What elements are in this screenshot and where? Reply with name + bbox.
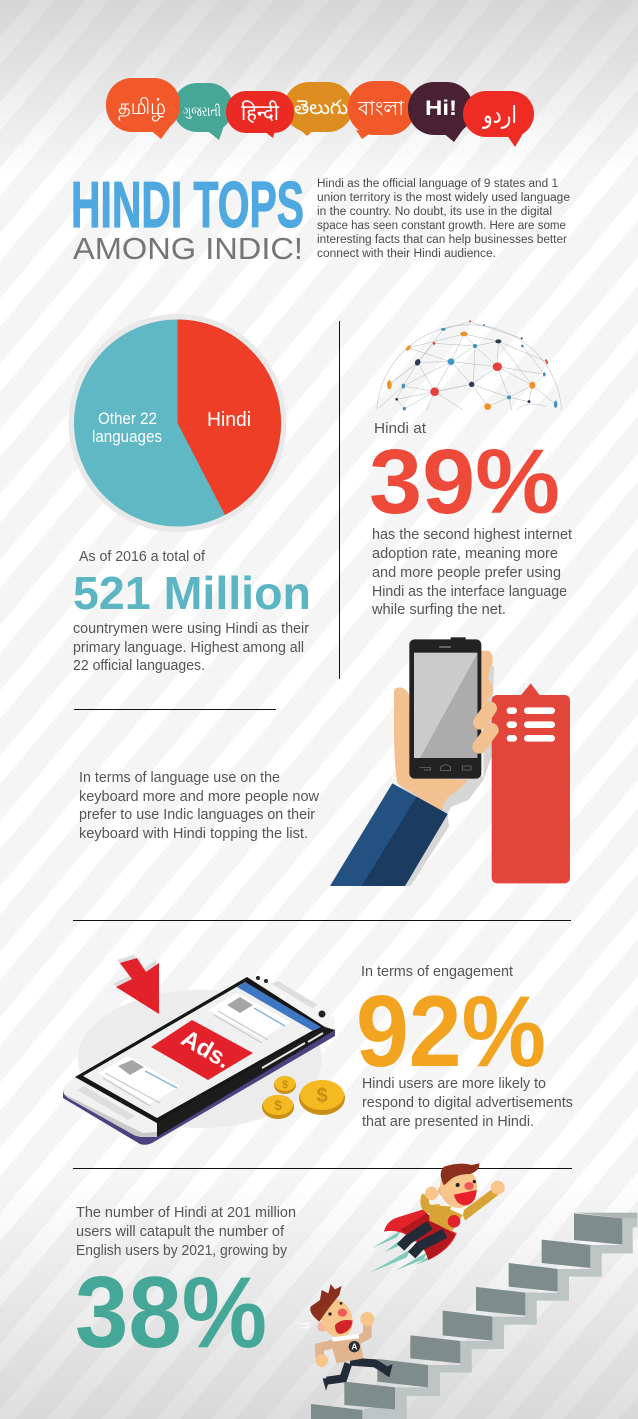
staircase (311, 1213, 637, 1419)
bubble: Telugu (284, 82, 353, 136)
stat: 38%: 38% (75, 1257, 267, 1369)
title (71, 168, 304, 266)
bubble: Hindi (226, 91, 294, 138)
shadows (395, 662, 494, 886)
keyboard paragraph: In terms of language use on the (79, 770, 280, 786)
stat: 521 million: countrymen were using Hindi as their (73, 621, 309, 637)
stat: 92% (356, 964, 573, 1130)
stat: 92%: 92% (356, 976, 546, 1088)
stat: 521 million: 22 official languages. (73, 658, 205, 674)
stat: 39% (369, 421, 572, 618)
stat: 39%: Hindi at (374, 421, 426, 437)
running man (293, 1284, 393, 1391)
bubble: Gujarati (173, 83, 233, 140)
intro paragraph: space has seen constant growth. Here are some (317, 220, 566, 232)
bubble: Bengali (348, 81, 415, 139)
stat: 38%: English users by 2021, growing by (76, 1243, 288, 1259)
pie chart: languages (92, 428, 162, 446)
title: HINDI TOPS (71, 168, 304, 241)
intro paragraph: connect with their Hindi audience. (317, 248, 496, 260)
red list panel (492, 683, 570, 883)
running man: A (351, 1342, 357, 1352)
stat: 521 million: 521 Million (73, 567, 311, 619)
back fingers (480, 651, 493, 710)
stat: 39%: and more people prefer using (372, 565, 561, 581)
stat: 92%: Hindi users are more likely to (362, 1076, 546, 1092)
title: AMONG INDIC! (73, 231, 303, 266)
stat: 38% (75, 1205, 296, 1369)
phone body (63, 976, 335, 1145)
keyboard paragraph: keyboard more and more people now (79, 789, 320, 805)
coins: $ (316, 1085, 328, 1107)
front fingers (479, 708, 492, 747)
stat: 92%: In terms of engagement (361, 964, 513, 980)
language speech bubbles (106, 78, 534, 147)
stat: 521 million: As of 2016 a total of (79, 549, 206, 565)
illustration: staircase and characters (293, 1163, 637, 1419)
bubble: Telugu: తెలుగు (294, 97, 348, 119)
stat: 521 million (73, 549, 311, 674)
pie chart: Other 22 (98, 410, 157, 428)
intro paragraph: union territory is the most widely used language (317, 192, 570, 204)
stat: 39%: has the second highest internet (372, 527, 572, 543)
keyboard paragraph (79, 770, 320, 842)
coins: $ (274, 1097, 282, 1113)
keyboard paragraph: keyboard with Hindi topping the list. (79, 826, 308, 842)
ad banner (151, 1020, 253, 1080)
bubble: Bengali: বাংলা (357, 98, 405, 120)
illustration: hand holding phone (330, 637, 570, 886)
stat: 38%: users will catapult the number of (76, 1224, 285, 1240)
coins: $ (282, 1079, 288, 1091)
stat: 39%: 39% (369, 431, 560, 533)
stat: 38%: The number of Hindi at 201 million (76, 1205, 296, 1221)
icon: network globe (377, 320, 562, 410)
bubble: Tamil: தமிழ் (118, 94, 166, 121)
stat: 92%: that are presented in Hindi. (362, 1114, 534, 1130)
arrow (113, 955, 159, 1014)
intro paragraph: interesting facts that can help businesses better (317, 234, 567, 246)
intro paragraph: in the country. No doubt, its use in the digital (317, 206, 552, 218)
flying hero (370, 1163, 505, 1273)
bubble: Urdu: اردو (482, 102, 517, 129)
bubble: Gujarati: ગુજરાતી (183, 103, 221, 119)
intro paragraph: Hindi as the official language of 9 states and 1 (317, 178, 558, 190)
keyboard paragraph: prefer to use Indic languages on their (79, 807, 315, 823)
bubble: Hi: Hi! (425, 97, 457, 120)
bubble: Hindi: हिन्दी (241, 100, 279, 125)
bubble: Tamil (106, 78, 180, 139)
bubble: Hi (408, 82, 473, 142)
pie chart: Hindi (207, 409, 251, 431)
pie chart (68, 314, 286, 532)
ad banner: Ads. (176, 1025, 235, 1074)
intro paragraph (317, 178, 570, 260)
stat: 92%: respond to digital advertisements (362, 1095, 573, 1111)
hand palm (394, 687, 468, 812)
coins (262, 1076, 345, 1119)
stat: 521 million: primary language. Highest among all (73, 640, 304, 656)
illustration: phone with ads (63, 955, 345, 1145)
stat: 39%: while surfing the net. (371, 602, 506, 618)
stat: 39%: Hindi as the interface language (372, 584, 567, 600)
stat: 39%: adoption rate, meaning more (372, 546, 558, 562)
sleeve (330, 783, 448, 886)
phone (409, 637, 481, 779)
bubble: Urdu (463, 91, 534, 147)
